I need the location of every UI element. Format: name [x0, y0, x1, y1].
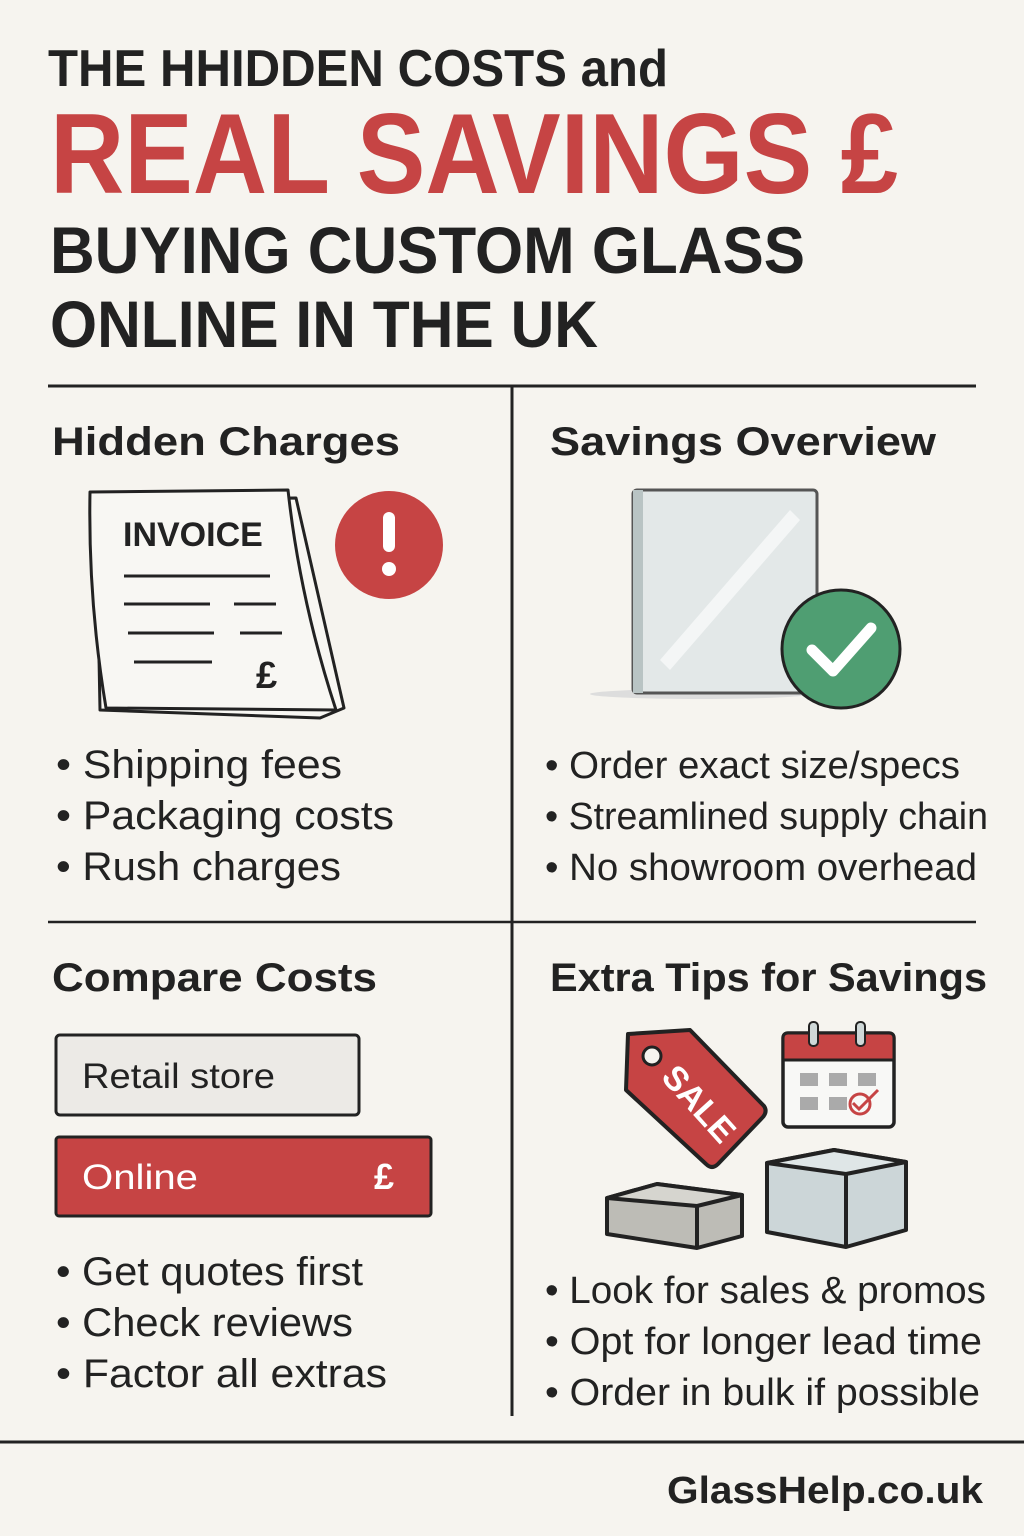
bullets: savings: • Streamlined supply chain [545, 796, 988, 838]
icon: invoice: £ [256, 655, 277, 697]
bullets: hidden charges: • Rush charges [56, 845, 341, 889]
bullets: compare: • Get quotes first [56, 1250, 363, 1294]
title [48, 40, 898, 361]
icon: invoice: INVOICE [123, 516, 263, 554]
icon: calendar [783, 1022, 894, 1127]
heading: extra tips: Extra Tips for Savings [550, 956, 987, 1000]
panel: hidden charges [52, 420, 443, 889]
title: REAL SAVINGS £ [50, 91, 898, 218]
bullets: tips [545, 1270, 986, 1414]
title: BUYING CUSTOM GLASS [50, 213, 805, 287]
icon: glass pane [590, 490, 817, 699]
heading: hidden charges: Hidden Charges [52, 420, 400, 464]
panel: savings overview [545, 420, 988, 889]
title: ONLINE IN THE UK [50, 287, 598, 361]
panel: extra tips [545, 956, 987, 1414]
title: THE HHIDDEN COSTS and [48, 40, 668, 98]
icon: boxes [607, 1150, 906, 1248]
icon: check [782, 590, 900, 708]
heading: savings overview: Savings Overview [550, 420, 937, 464]
bullets: compare: • Factor all extras [56, 1352, 387, 1396]
heading: compare costs: Compare Costs [52, 956, 377, 1000]
bullets: tips: • Opt for longer lead time [545, 1321, 982, 1363]
footer: GlassHelp.co.uk [667, 1470, 984, 1512]
online box: £ [374, 1156, 394, 1197]
bullets: compare: • Check reviews [56, 1301, 353, 1345]
bullets: tips: • Order in bulk if possible [545, 1372, 980, 1414]
bullets: savings: • No showroom overhead [545, 847, 977, 889]
icon: sale tag: SALE [654, 1058, 743, 1151]
icon: sale tag [626, 1030, 766, 1167]
icon: invoice [90, 490, 344, 718]
bullets: savings: • Order exact size/specs [545, 745, 960, 787]
panel: compare costs [52, 956, 431, 1396]
retail store box [56, 1035, 359, 1115]
retail store box: Retail store [82, 1057, 275, 1096]
bullets: hidden charges [56, 743, 394, 889]
icon: exclamation [335, 491, 443, 599]
online box [56, 1137, 431, 1216]
bullets: hidden charges: • Shipping fees [56, 743, 342, 787]
bullets: savings [545, 745, 988, 889]
bullets: hidden charges: • Packaging costs [56, 794, 394, 838]
bullets: compare [56, 1250, 387, 1396]
bullets: tips: • Look for sales & promos [545, 1270, 986, 1312]
online box: Online [82, 1158, 198, 1197]
